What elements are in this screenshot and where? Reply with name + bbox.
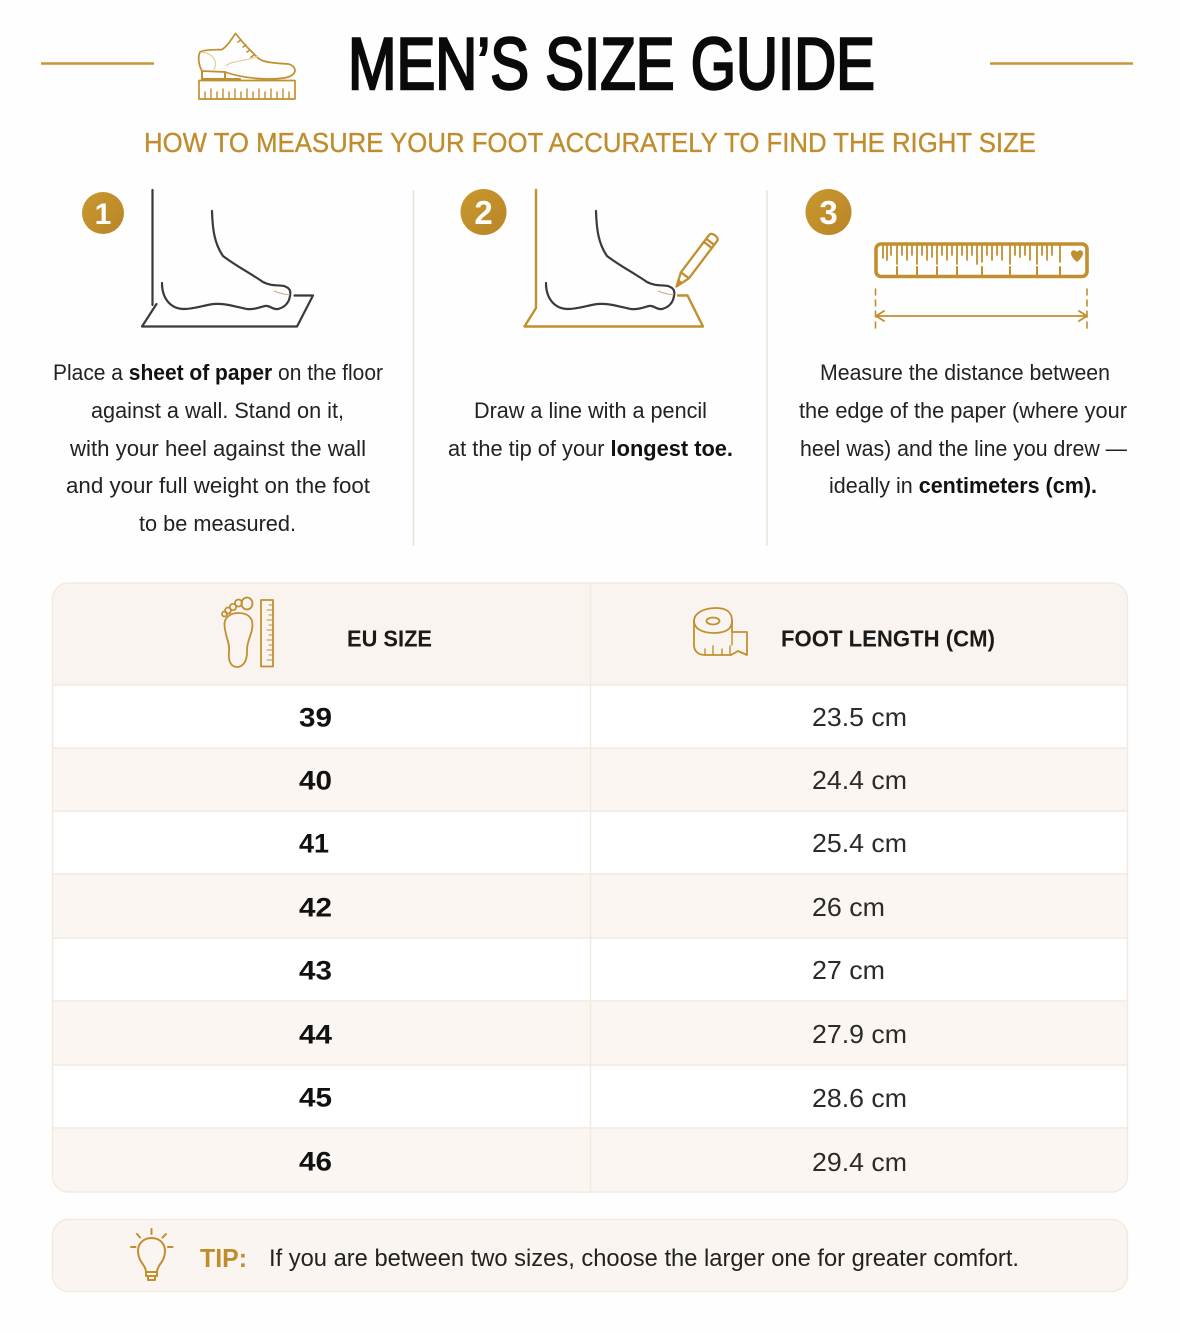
step 3 badge: 3 — [819, 194, 838, 231]
row 43: 43 — [299, 956, 332, 986]
step 1 badge: 1 — [95, 198, 111, 231]
step 2 badge: 2 — [474, 194, 493, 231]
row 44 — [299, 1019, 907, 1050]
step 1 text: against a wall. Stand on it, — [91, 398, 344, 423]
column heading: EU size: EU SIZE — [347, 626, 432, 652]
row 40: 40 — [299, 766, 332, 796]
row 44: 44 — [299, 1020, 332, 1050]
row 39: 39 — [299, 702, 332, 732]
row 46: 46 — [299, 1146, 332, 1176]
row 43: 27 cm — [812, 955, 885, 985]
row 42: 42 — [299, 892, 332, 922]
step 2 text: Draw a line with a pencil — [474, 398, 707, 423]
icon: shoe on ruler — [199, 34, 295, 99]
subtitle: HOW TO MEASURE YOUR FOOT ACCURATELY TO FIND THE RIGHT SIZE — [144, 127, 1036, 158]
row 40 — [299, 765, 907, 796]
row 45: 45 — [299, 1082, 332, 1112]
panel: size table — [52, 583, 1128, 1192]
step 1 text: with your heel against the wall — [69, 436, 366, 461]
step 2 text — [448, 398, 733, 461]
row 45: 28.6 cm — [812, 1083, 907, 1113]
row 43 — [299, 955, 885, 986]
left header rule — [41, 62, 154, 65]
step 2 illustration: foot and pencil — [524, 190, 719, 326]
alternating row backgrounds — [53, 748, 1127, 1192]
step 3 text: the edge of the paper (where your — [799, 398, 1127, 423]
row 41 — [299, 828, 907, 858]
panel: tip — [52, 1220, 1128, 1292]
panel: step 3 — [799, 189, 1127, 498]
step 3 text — [799, 360, 1127, 498]
row 45 — [299, 1082, 907, 1113]
title: MEN’S SIZE GUIDE — [348, 24, 875, 105]
row 41: 41 — [299, 828, 329, 858]
row 46 — [299, 1146, 907, 1177]
tip text: If you are between two sizes, choose the larger one for greater comfort. — [269, 1245, 1019, 1272]
step 2 badge — [460, 189, 506, 235]
step 3 text: Measure the distance between — [820, 360, 1110, 385]
right header rule — [990, 62, 1133, 65]
row 39: 23.5 cm — [812, 702, 907, 732]
step 3 badge — [806, 189, 852, 235]
row 41: 25.4 cm — [812, 828, 907, 858]
icon: measuring tape — [694, 608, 747, 655]
row 44: 27.9 cm — [812, 1019, 907, 1049]
step 1 badge — [82, 192, 124, 234]
step 3 text: ideally in centimeters (cm). — [829, 473, 1097, 498]
icon: foot and ruler — [222, 598, 273, 667]
panel: step 2 — [448, 189, 733, 461]
step divider 1 — [412, 190, 414, 546]
step 1 text: to be measured. — [139, 511, 296, 536]
step 1 illustration: foot on paper — [142, 190, 313, 326]
row 40: 24.4 cm — [812, 765, 907, 795]
icon: light bulb — [131, 1229, 172, 1280]
row 42 — [299, 892, 885, 922]
table header background — [52, 583, 1128, 685]
step 2 text: at the tip of your longest toe. — [448, 436, 733, 461]
step 1 text: and your full weight on the foot — [66, 473, 370, 498]
row 39 — [299, 702, 907, 732]
row 46: 29.4 cm — [812, 1147, 907, 1177]
step divider 2 — [766, 190, 768, 546]
step 3 text: heel was) and the line you drew — — [800, 436, 1127, 461]
step 3 illustration: ruler and measurement arrow — [876, 244, 1087, 332]
column heading: foot length: FOOT LENGTH (CM) — [781, 626, 995, 652]
step 1 text — [53, 360, 383, 536]
panel: step 1 — [53, 190, 383, 536]
row 42: 26 cm — [812, 892, 885, 922]
step 1 text: Place a sheet of paper on the floor — [53, 360, 383, 385]
tip label: TIP: — [200, 1245, 247, 1273]
